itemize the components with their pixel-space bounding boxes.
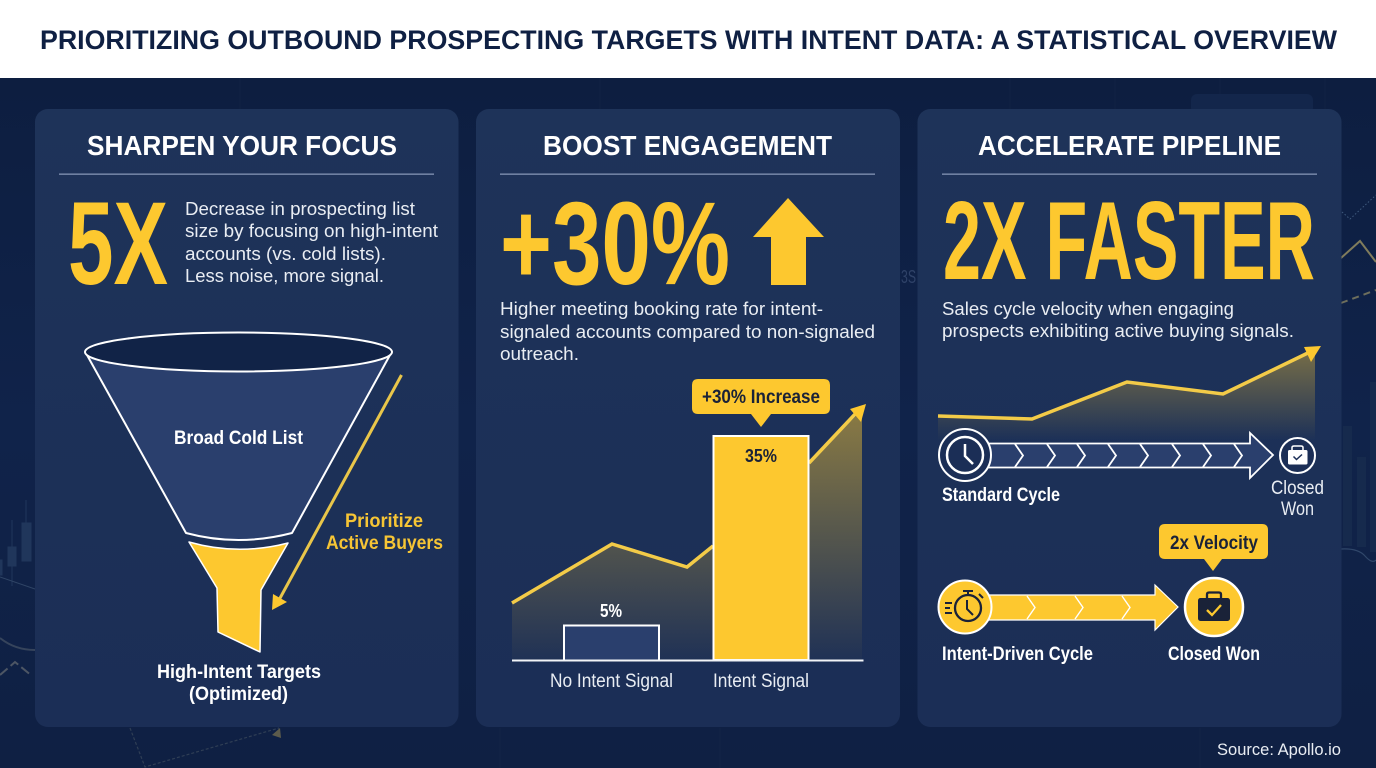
label: closed won bold: Closed Won [1168, 644, 1260, 665]
header band [0, 0, 1376, 78]
funnel opening [85, 332, 392, 372]
description: list size [185, 199, 438, 286]
description: list size: accounts (vs. cold lists). [185, 244, 386, 264]
callout: +30% increase [692, 379, 830, 427]
label: prioritize active buyers [326, 511, 443, 554]
description: list size: Decrease in prospecting list [185, 199, 415, 219]
funnel lower yellow spout [189, 542, 288, 652]
panel heading: boost engagement: BOOST ENGAGEMENT [543, 130, 832, 161]
label: high-intent targets: High-Intent Targets [157, 661, 321, 683]
callout: 2x velocity: 2x Velocity [1170, 533, 1258, 554]
label: prioritize active buyers: Prioritize [345, 511, 423, 532]
panel: boost engagement [476, 109, 900, 727]
arrow: standard cycle [985, 433, 1273, 478]
trend chart [938, 346, 1321, 440]
panel: accelerate pipeline [918, 109, 1342, 727]
funnel [85, 332, 392, 652]
trend area [512, 410, 862, 660]
description: meeting booking: signaled accounts compared to non-signaled [500, 322, 875, 342]
description: list size: size by focusing on high-intent [185, 221, 438, 241]
label: closed won: Won [1281, 499, 1314, 520]
label: broad cold list: Broad Cold List [174, 428, 304, 449]
panel heading: accelerate pipeline: ACCELERATE PIPELINE [978, 130, 1281, 161]
funnel upper body [87, 355, 390, 540]
callout: +30% increase: +30% Increase [702, 387, 820, 408]
icon: clock [939, 429, 991, 481]
icon: stopwatch [938, 580, 992, 634]
label: standard cycle: Standard Cycle [942, 485, 1060, 506]
title: PRIORITIZING OUTBOUND PROSPECTING TARGETS WITH INTENT DATA: A STATISTICAL OVERVIEW [40, 25, 1337, 55]
icon: closed won briefcase large [1185, 578, 1243, 636]
axis label: no intent signal: No Intent Signal [550, 671, 673, 692]
label: closed won [1271, 478, 1324, 520]
description: meeting booking: outreach. [500, 344, 579, 364]
label: prioritize active buyers: Active Buyers [326, 533, 443, 554]
label: high-intent targets: (Optimized) [189, 683, 288, 705]
panel: sharpen your focus [35, 109, 458, 727]
description: meeting booking [500, 299, 875, 364]
panel heading: sharpen your focus: SHARPEN YOUR FOCUS [87, 130, 397, 161]
bar chart: meeting rate [512, 379, 866, 692]
description: list size: Less noise, more signal. [185, 266, 384, 286]
description: sales cycle: prospects exhibiting active buying signals. [942, 321, 1294, 341]
background: 3S [901, 267, 916, 287]
bar: no intent signal [564, 626, 659, 660]
value: 5%: 5% [600, 601, 622, 621]
label: intent-driven cycle: Intent-Driven Cycle [942, 644, 1093, 665]
arrow: prioritize [272, 375, 402, 610]
icon: up arrow [753, 198, 824, 285]
big stat: 5X: 5X [68, 178, 168, 310]
description: sales cycle: Sales cycle velocity when engaging [942, 299, 1234, 319]
callout: 2x velocity [1159, 524, 1268, 571]
axis label: intent signal: Intent Signal [713, 671, 809, 692]
description: sales cycle [942, 299, 1294, 341]
icon: closed won briefcase small [1280, 438, 1315, 473]
label: closed won: Closed [1271, 478, 1324, 499]
bar: intent signal [714, 436, 808, 660]
label: high-intent targets [157, 661, 321, 705]
source note: Source: Apollo.io [1217, 740, 1341, 759]
value: 35%: 35% [745, 446, 777, 466]
arrow: intent-driven cycle [985, 585, 1178, 630]
trend line [512, 404, 866, 603]
description: meeting booking: Higher meeting booking rate for intent- [500, 299, 823, 319]
big stat: +30%: +30% [500, 178, 730, 310]
